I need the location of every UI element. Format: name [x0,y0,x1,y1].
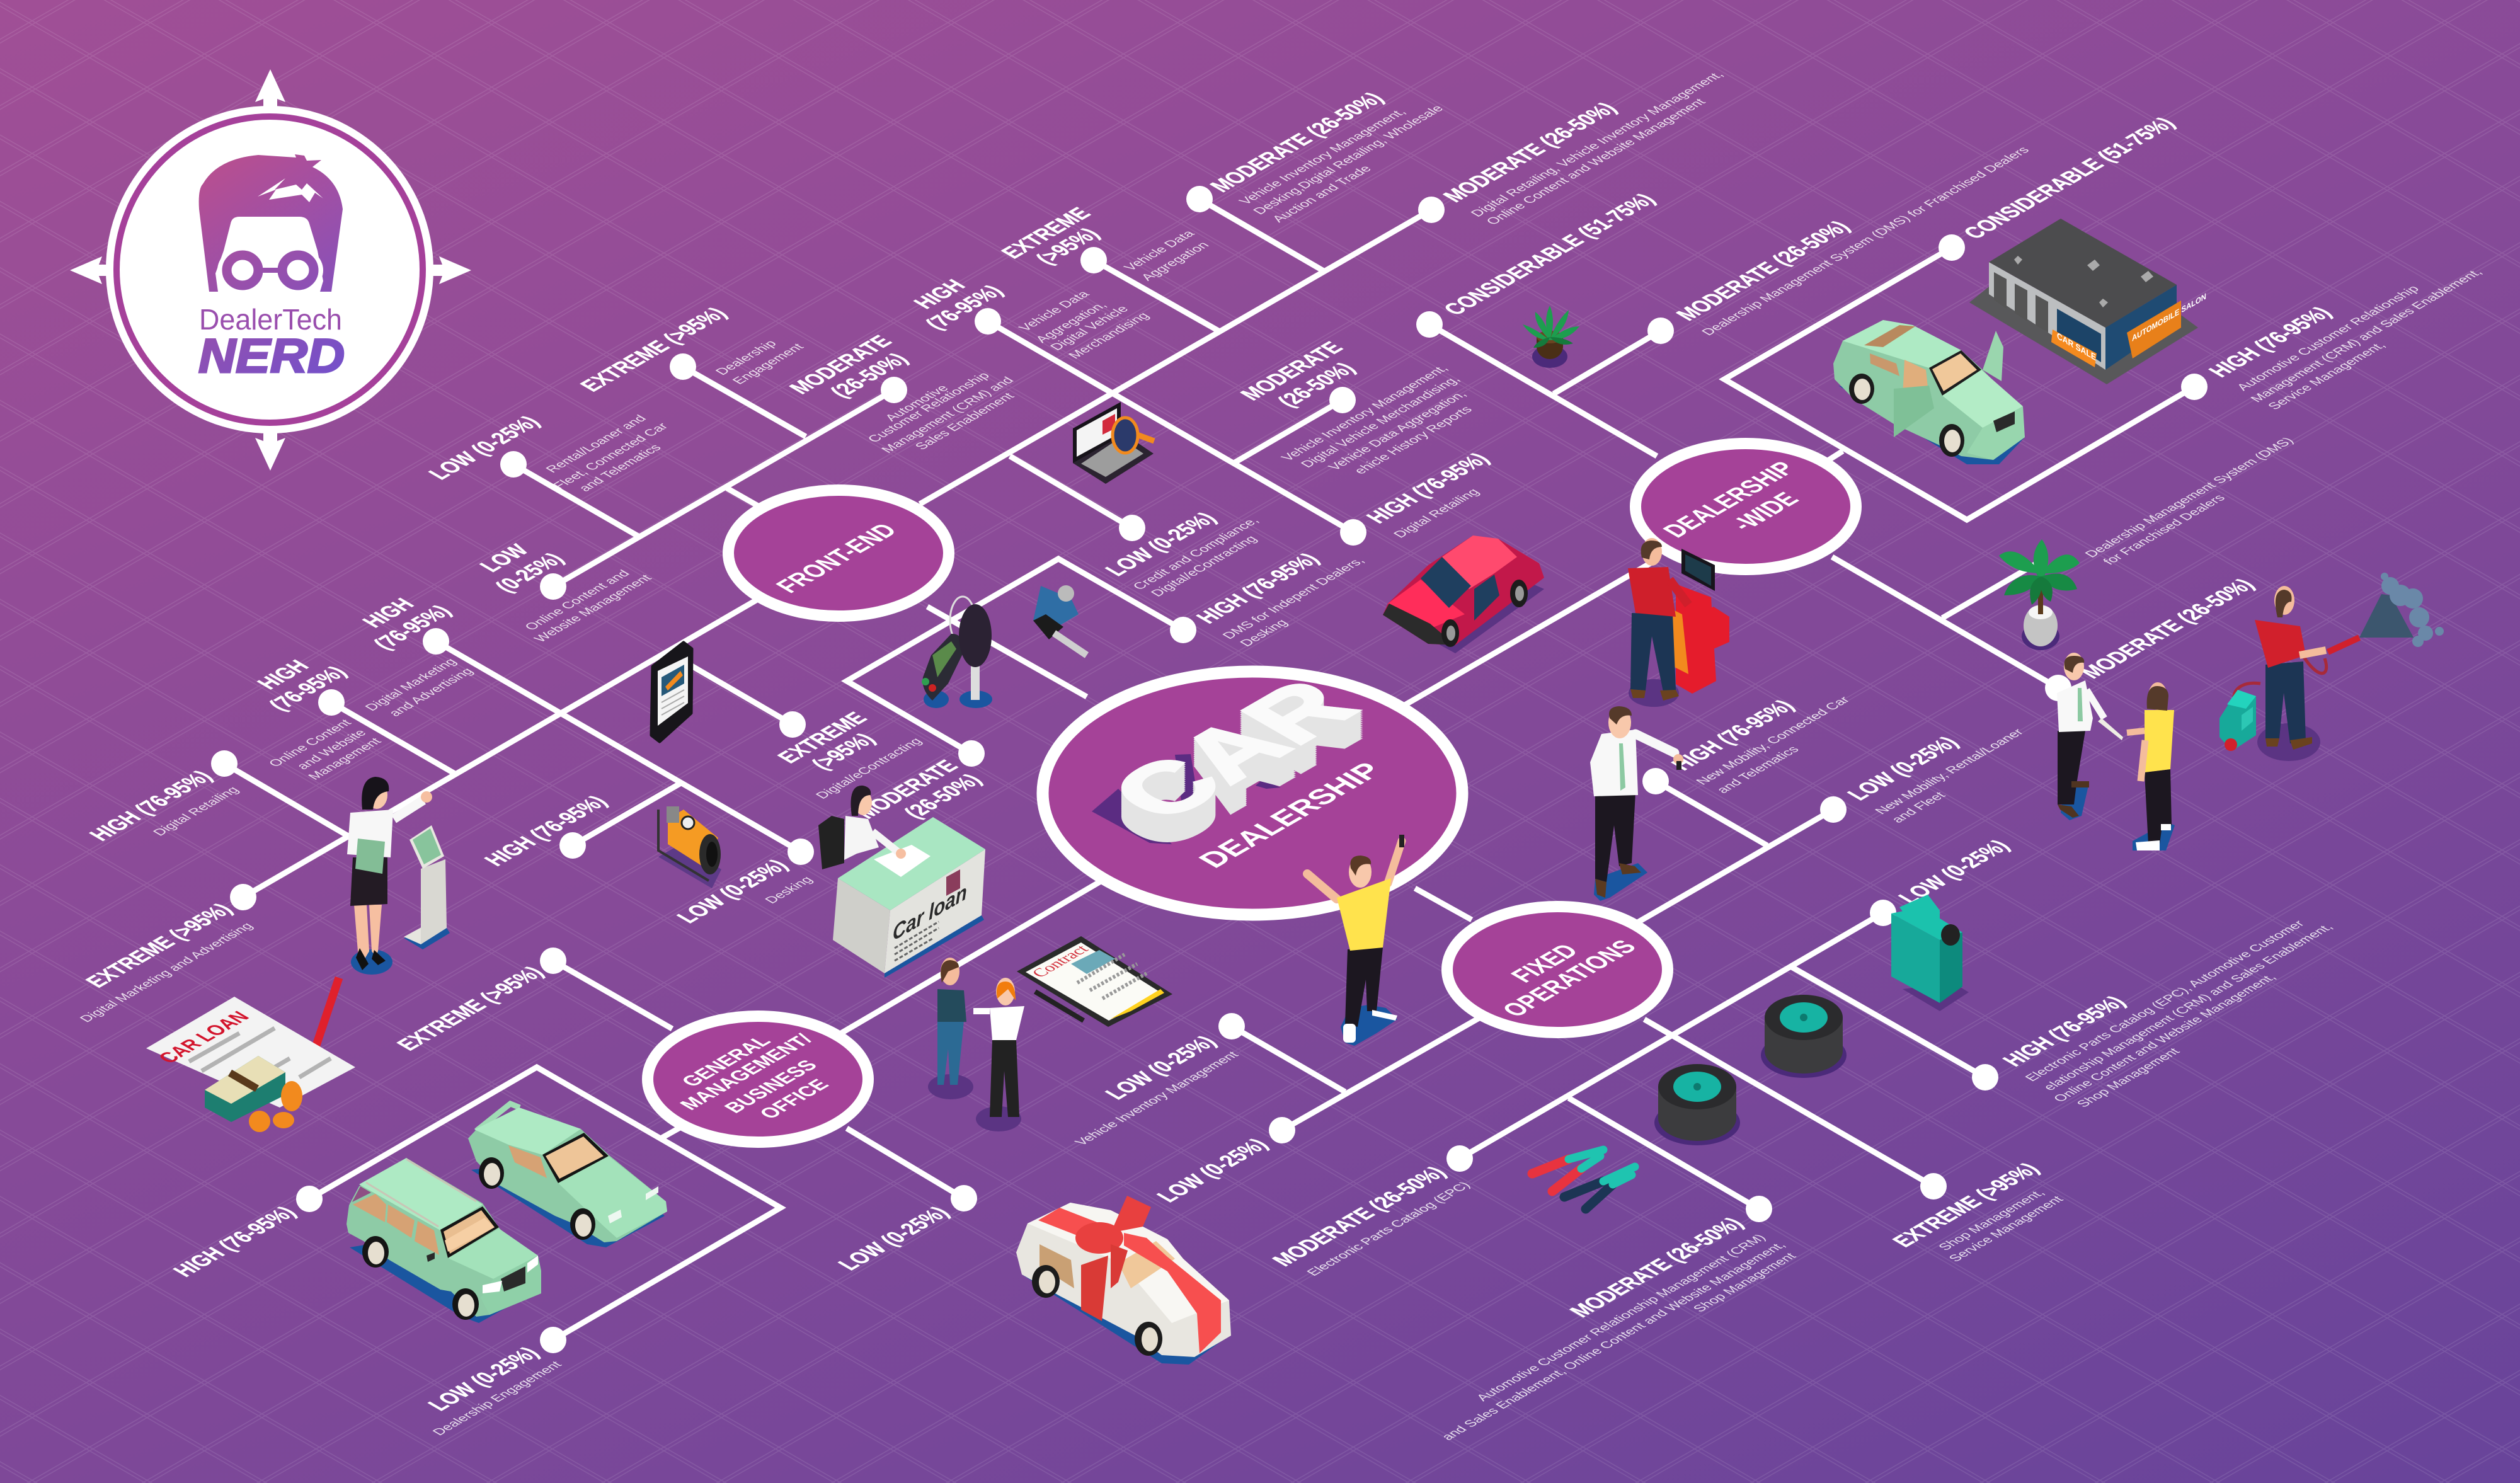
hub: general management / business office: GENERAL [677,1033,776,1090]
label: low fixed left: LOW (0-25%) [1152,1135,1274,1206]
label: high new mobility: and Telematics [1714,744,1802,795]
label: low rental loaner: and Telematics [576,442,665,493]
label: low rental loaner: LOW (0-25%) [423,413,546,483]
logo wordmark [198,303,345,383]
figure: mechanic [1628,538,1688,707]
figure: salesman with key [1590,706,1683,901]
logo wordmark: NERD [198,329,345,383]
label: moderate automotive crm: Customer Relationship [864,370,993,445]
connector: front-end to central hub with key diamond [847,559,1183,753]
connector: front-end lower-left trunk [224,598,801,897]
label: high digital retailing center: Digital Retailing [1390,487,1482,540]
label: high electronic parts: Shop Management [2074,1046,2183,1109]
icon: dealership building [1969,219,2206,384]
hub: front-end [728,490,949,616]
figure: man in yellow raising keys [1307,835,1404,1046]
connector: general management branches [309,961,964,1340]
icon: kiosk [404,825,450,949]
label: high vehicle data aggregation: Digital Vehicle [1047,304,1131,352]
hub label: dealership: DEALERSHIP [1192,759,1389,873]
connector: front-end upper trunk [920,199,1431,532]
hub: general management / business office: OFFICE [754,1076,834,1122]
label: moderate customer relationship: MODERATE (26-50%) [1565,1215,1749,1321]
icon: air blower [658,806,721,888]
label: moderate vehicle inventory desking [1205,89,1446,224]
connector: central hub to fixed operations [1415,888,1472,920]
logo wordmark: DealerTech [199,303,342,336]
label: dms for franchised dealers: Dealership Management System (DMS) [2082,435,2297,559]
icon: small potted plant [1523,306,1579,368]
label: extreme digital marketing: Digital Marketing and Advertising [77,921,256,1024]
label: moderate dms franchised: MODERATE (26-50%) [1671,218,1855,324]
label: moderate vehicle history: MODERATE [1235,338,1349,404]
label: high vehicle data aggregation: (76-95%) [920,282,1009,333]
label: high electronic parts: Electronic Parts Catalog (EPC), Automotive Customer [2022,919,2308,1084]
label: low vehicle inventory: Vehicle Inventory Management [1072,1050,1242,1148]
connector: dealership-wide branches [1429,248,2194,688]
label: moderate vehicle inventory desking: MODERATE (26-50%) [1205,89,1389,196]
icon: tire stack two [1654,1064,1740,1145]
label: moderate digital retailing: Digital Retailing, Vehicle Inventory Management, [1468,69,1727,219]
label: low general management right: LOW (0-25%) [833,1203,955,1274]
label: low canister: LOW (0-25%) [1893,837,2015,907]
icon: nerd head [199,154,343,293]
label: low online content [474,541,655,644]
figure: man with spray hose [2219,573,2444,761]
icon: car key [1033,585,1087,655]
label: high vehicle data aggregation: Vehicle Data [1016,289,1093,333]
label: low online content: Website Management [531,573,655,644]
label: extreme shop management: Shop Management, [1935,1188,2048,1252]
label: moderate automotive crm: Management (CRM) and [878,375,1017,455]
hub: central car dealership [1043,666,1462,915]
label: extreme dealership engagement: Engagement [730,341,807,386]
label: moderate front desk: (26-50%) [899,771,987,822]
label: high online content website [252,656,385,782]
label: extreme digital econtracting: (>95%) [806,730,881,773]
icon: gift car with ribbon [1016,1196,1231,1365]
label: moderate vehicle inventory desking: Desking,Digital Retailing, Wholesale [1250,103,1446,217]
label: high blower: HIGH (76-95%) [479,793,613,869]
label: extreme general management: EXTREME (>95%) [392,963,549,1054]
sign text: car sale: CAR SALE [2057,330,2096,363]
label: extreme digital econtracting: EXTREME [772,709,873,767]
label: moderate vehicle history: Vehicle Data Aggregation, [1326,389,1470,472]
hub: fixed operations: OPERATIONS [1496,936,1643,1021]
label: high crm service: HIGH (76-95%) [2204,304,2337,381]
label: moderate customer relationship: and Sales Enablement, Online Content and Website Management, [1438,1240,1789,1442]
label: high digital retailing center: HIGH (76-95%) [1361,450,1495,527]
label: high online content website: Management [305,736,385,782]
label: low online content: Online Content and [522,568,633,633]
label: low credit and compliance: Credit and Compliance, [1130,515,1262,592]
label: high crm service: Service Management, [2265,340,2389,412]
label: dms for franchised dealers: for Franchised Dealers [2100,493,2228,567]
label: high online content website: (76-95%) [264,663,352,714]
label: high vehicle data aggregation [908,276,1152,361]
figure: two men shaking hands [2057,653,2175,850]
label: low online content: (0-25%) [490,550,570,596]
clipboard title: Contract [1028,942,1093,980]
hub: front-end: FRONT-END [770,520,903,597]
label: high digital marketing: Digital Marketing [362,656,460,713]
label: moderate vehicle inventory desking: Auction and Trade [1269,163,1375,224]
label: high digital marketing: and Advertising [386,666,476,718]
label: high new mobility: New Mobility, Connected Car [1693,694,1853,787]
figure: finance agent [818,786,906,869]
icon: laptop with magnifier [1073,402,1154,484]
hub: fixed operations [1447,907,1668,1033]
connector: front-end upper-left trunk [513,367,894,587]
label: low new mobility rental: and Fleet [1889,790,1949,825]
label: moderate automotive crm: Automotive [882,383,952,423]
figure: woman with folder [347,777,432,975]
label: moderate dms franchised: Dealership Management System (DMS) for Franchised Dealers [1698,145,2032,338]
label: moderate front desk: MODERATE [850,757,964,822]
label: extreme vehicle data: Aggregation [1138,240,1212,283]
label: high digital retailing: Digital Retailing [150,785,242,838]
label: high new mobility: HIGH (76-95%) [1666,697,1800,774]
icon: key fobs [922,597,992,708]
icon: green car with open doors [1833,320,2025,464]
node dots [211,186,2208,1353]
hub: general management / business office [648,1016,868,1142]
label: high vehicle data aggregation: Merchandising [1065,311,1152,361]
icon: car loan paper with money [146,978,355,1132]
label: low desking: LOW (0-25%) [672,856,794,927]
label: high electronic parts: Online Content and Website Management, [2051,972,2279,1104]
icon: green sports car [468,1104,667,1247]
label: high dms independent dealers: HIGH (76-95%) [1191,550,1325,627]
label: moderate automotive crm: Sales Enablement [912,391,1017,452]
label: low credit and compliance: Digital/eContracting [1148,534,1261,598]
label: high digital retailing: HIGH (76-95%) [84,767,218,844]
label: high electronic parts: HIGH (76-95%) [1998,993,2131,1070]
label: extreme shop management: EXTREME (>95%) [1887,1160,2045,1251]
label: moderate vehicle history: Vehicle Inventory Management, [1278,364,1452,463]
label: moderate automotive crm: (26-50%) [825,350,914,401]
label: moderate handshake: MODERATE (26-50%) [2076,576,2260,682]
label: high online content website: HIGH [252,656,315,693]
label: low dealership engagement: LOW (0-25%) [423,1344,545,1414]
label: low rental loaner [423,413,672,493]
label: extreme vehicle data: Vehicle Data [1121,228,1198,273]
figure: couple discussing [928,958,1024,1131]
label: high online content website: Online Content [266,718,355,769]
logo: DealerTech Nerd badge [70,69,471,471]
paper title: CAR LOAN [154,1008,255,1067]
label: low online content: LOW [474,541,535,576]
label: high digital marketing: HIGH [357,595,420,631]
label: moderate automotive crm [784,332,1017,455]
label: extreme digital marketing: EXTREME (>95%) [81,900,238,991]
hub: dealership-wide [1635,444,1856,570]
label: high general management: HIGH (76-95%) [168,1203,302,1280]
label: moderate automotive crm: MODERATE [784,332,898,398]
3d word CAR: CAR [1087,666,1379,834]
label: high crm service: Management (CRM) and Sales Enablement, [2248,267,2485,404]
label: moderate digital retailing: MODERATE (26-50%) [1438,100,1622,206]
icon: diagnostic machine [1663,549,1729,694]
label: extreme dealership engagement: EXTREME (>95%) [575,304,733,395]
icon: red car [1383,535,1544,653]
desk sign text: Car loan [893,879,967,946]
label: moderate electronic parts catalog: Electronic Parts Catalog (EPC) [1304,1180,1474,1278]
label: low new mobility rental: LOW (0-25%) [1842,733,1964,804]
icon: tire stack one [1761,995,1847,1078]
label: moderate vehicle history: (26-50%) [1273,360,1361,411]
connector: central hub to dealership-wide [1396,559,1657,710]
hub: dealership-wide: -WIDE [1725,488,1806,535]
connector: central hub to general management [841,877,1108,1033]
label: moderate vehicle history: Digital Vehicle Merchandising, [1298,374,1463,469]
label: moderate vehicle history [1235,338,1475,476]
hub: dealership-wide: DEALERSHIP [1657,457,1802,542]
label: moderate vehicle history: ehicle History Reports [1351,404,1475,476]
icon: finance desk [833,817,985,978]
label: high crm service: Automotive Customer Relationship [2234,283,2422,392]
hub: general management / business office: MANAGEMENT/ [675,1031,818,1113]
label: moderate customer relationship: Automotive Customer Relationship Management (CRM) [1474,1232,1769,1403]
hub: general management / business office: BUSINESS [719,1056,822,1116]
label: low dealership engagement: Dealership Engagement [430,1360,565,1438]
label: extreme digital econtracting [772,709,925,801]
label: low credit and compliance [1100,509,1262,598]
label: moderate customer relationship: Shop Management [1690,1251,1799,1314]
label: extreme vehicle data: EXTREME [996,204,1097,262]
label: moderate electronic parts catalog: MODERATE (26-50%) [1268,1164,1452,1270]
label: high vehicle data aggregation: HIGH [908,276,971,312]
icon: jumper clamps [1532,1150,1635,1209]
label: high online content website: and Website [294,728,370,772]
label: extreme dealership engagement [575,304,807,395]
label: considerable dealership wide: CONSIDERABLE (51-75%) [1958,114,2180,243]
label: low vehicle inventory: LOW (0-25%) [1100,1033,1222,1103]
label: extreme vehicle data: (>95%) [1031,225,1105,268]
label: high dms independent dealers: DMS for Indepent Dealers, [1220,556,1368,641]
label: high dms independent dealers: Desking [1237,617,1291,648]
icon: palm in pot [1999,539,2080,650]
hub: fixed operations: FIXED [1504,940,1585,987]
label: high electronic parts: elationship Management (CRM) and Sales Enablement, [2041,922,2336,1092]
icon: jerry can [1891,895,1969,1011]
sign text: automobile salon: AUTOMOBILE SALON [2132,291,2206,343]
connector: fixed operations branches [1232,781,1985,1209]
icon: green suv [346,1158,541,1323]
label: high digital marketing [357,595,476,718]
label: high digital marketing: (76-95%) [369,602,457,653]
label: low desking: Desking [762,874,816,905]
label: considerable: CONSIDERABLE (51-75%) [1438,190,1661,319]
label: low new mobility rental: New Mobility, Rental/Loaner [1872,727,2027,816]
label: moderate digital retailing: Online Content and Website Management [1483,96,1709,227]
label: low rental loaner: Fleet, Connected Car [550,421,672,491]
label: extreme dealership engagement: Dealership [713,338,780,377]
icon: contract clipboard [1017,936,1172,1027]
label: low rental loaner: Rental/Loaner and [543,413,650,475]
label: low credit and compliance: LOW (0-25%) [1100,509,1222,580]
label: high vehicle data aggregation: Aggregation, [1033,300,1110,345]
label: moderate vehicle inventory desking: Vehicle Inventory Management, [1236,107,1409,207]
label: extreme digital econtracting: Digital/eContracting [813,736,925,801]
label: extreme vehicle data [996,204,1212,283]
label: extreme shop management: Service Management [1946,1194,2066,1264]
icon: smartphone [651,643,692,742]
